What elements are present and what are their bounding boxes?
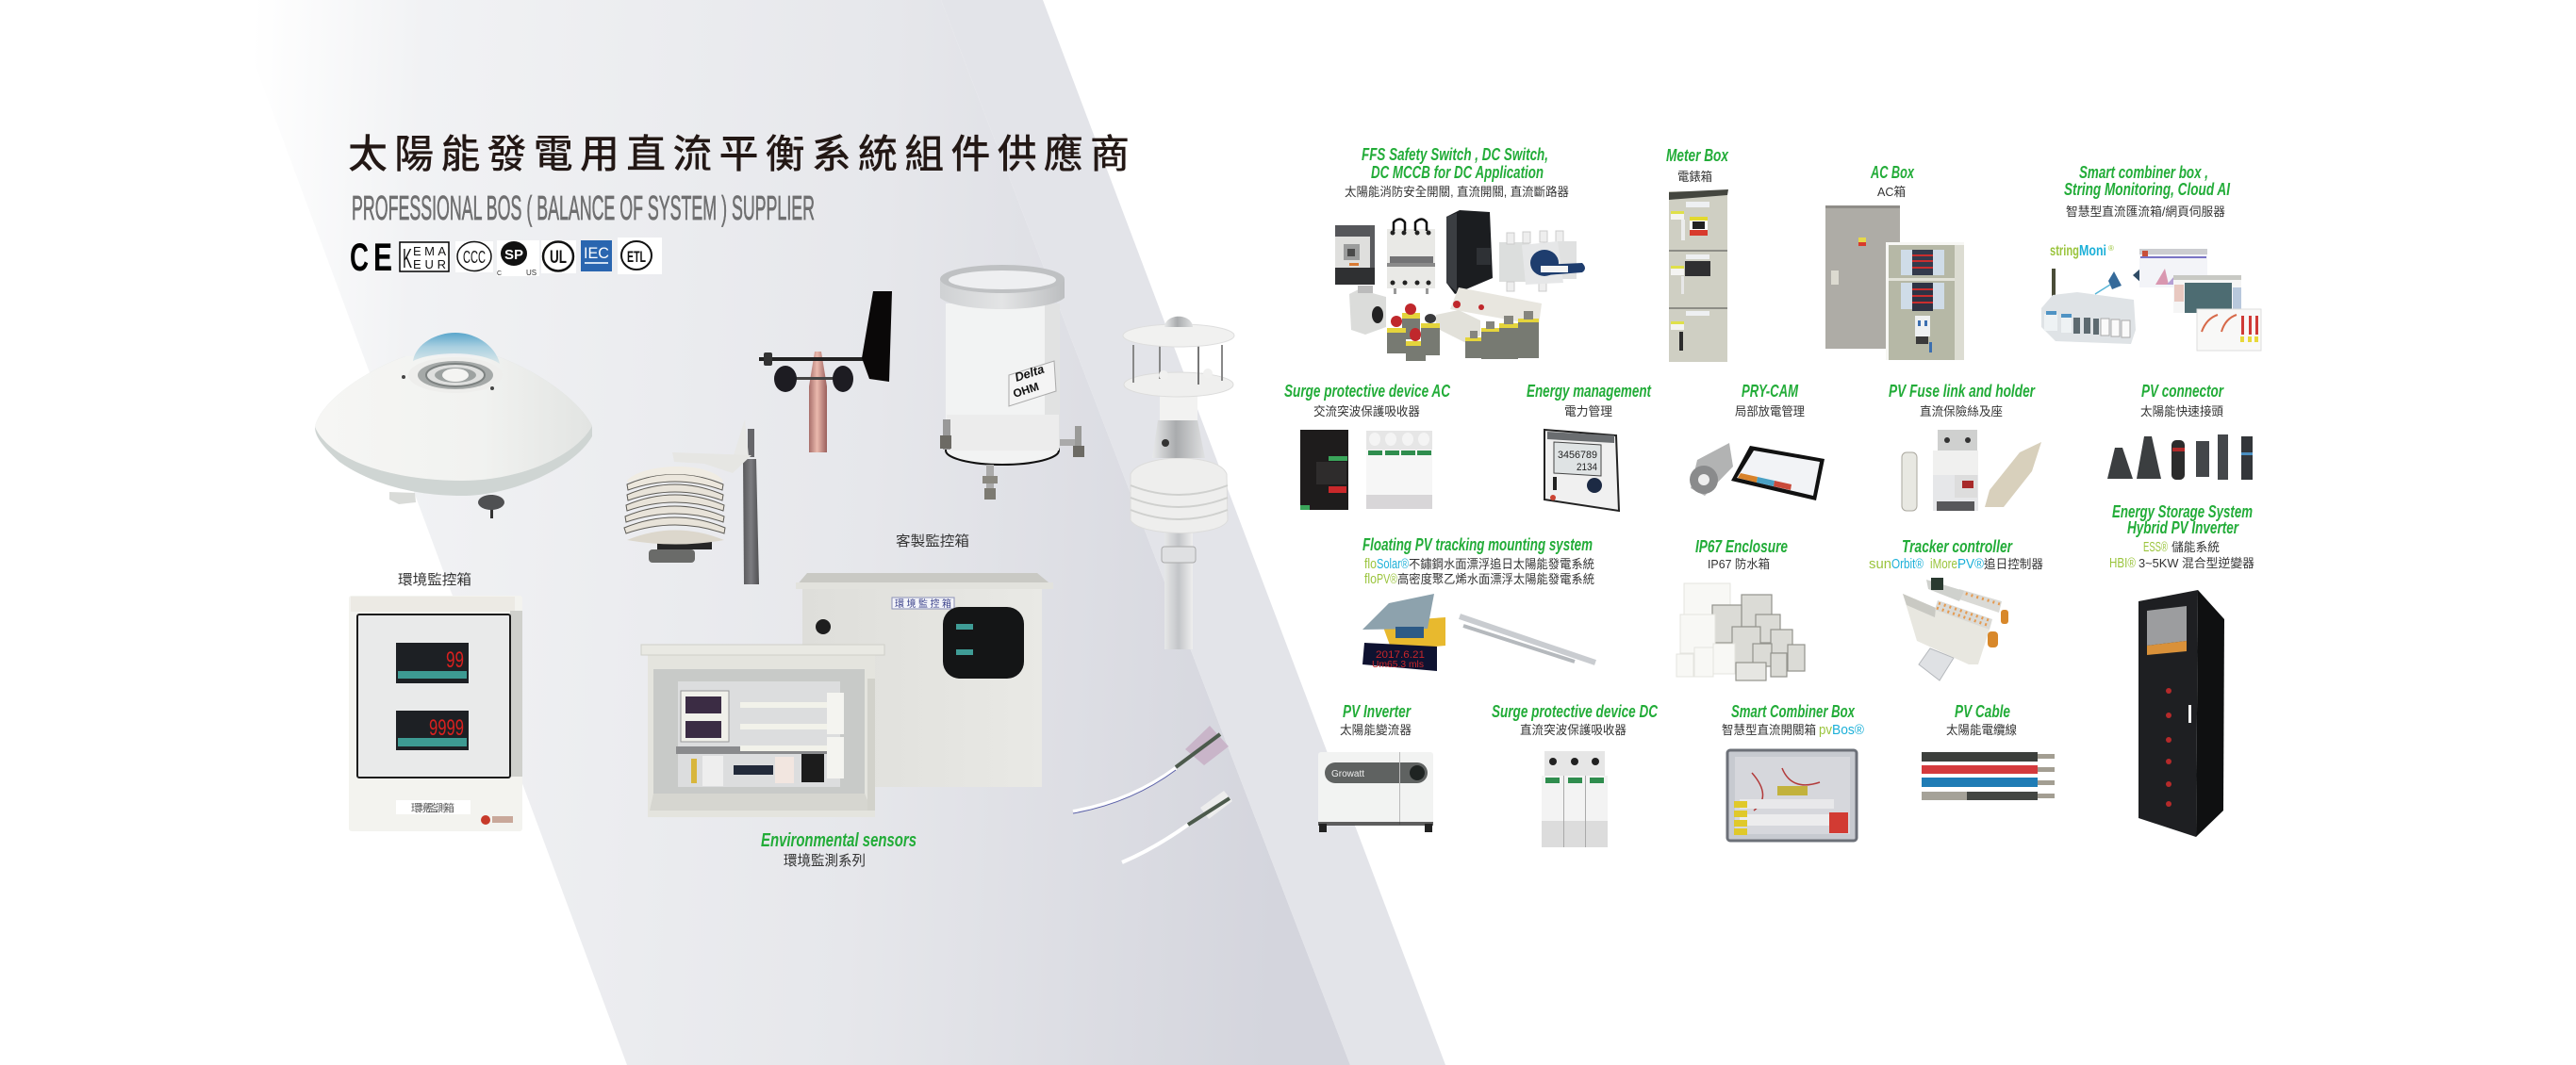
product: surge protective device DC bbox=[1492, 702, 1659, 847]
icon: wind vane bbox=[759, 291, 892, 452]
label bbox=[2109, 502, 2254, 571]
LED display bbox=[1362, 643, 1437, 671]
logo: CE: E bbox=[373, 235, 392, 279]
meter block bbox=[681, 691, 729, 742]
logo: CE bbox=[350, 235, 392, 279]
meter: 9999: 9999 bbox=[429, 715, 464, 741]
label bbox=[1340, 702, 1412, 737]
disconnect switch with blue handle bbox=[1499, 231, 1585, 291]
label: HBI® bbox=[2109, 555, 2136, 571]
logo: KEMA KEUR: K bbox=[403, 244, 412, 274]
label: Meter Box bbox=[1666, 146, 1729, 165]
label: 智慧型直流開關箱 bbox=[1722, 723, 1816, 737]
label: Solar® bbox=[1377, 556, 1409, 572]
open panel bbox=[1886, 242, 1964, 360]
closed door bbox=[1825, 205, 1900, 349]
MCB 4-pole bbox=[1387, 219, 1435, 294]
icon: rain gauge bbox=[940, 265, 1084, 500]
logo: IEC bbox=[581, 240, 612, 271]
product: PV fuse link and holder bbox=[1889, 382, 2041, 511]
label: custom monitoring box: 客製監控箱 bbox=[896, 532, 969, 549]
logo: ETL bbox=[618, 238, 662, 274]
power meter: 2134 bbox=[1577, 462, 1597, 473]
label: 局部放電管理 bbox=[1735, 404, 1805, 418]
label: sun bbox=[1869, 556, 1891, 572]
label: 智慧型直流匯流箱/網頁伺服器 bbox=[2066, 205, 2225, 219]
label: 太陽能電纜線 bbox=[1946, 723, 2017, 737]
product: PV inverter bbox=[1318, 702, 1433, 832]
power meter: 3456789 bbox=[1558, 450, 1597, 461]
string monitoring devices bbox=[2041, 269, 2150, 344]
label: String Monitoring, Cloud AI bbox=[2064, 180, 2231, 199]
label: PV® bbox=[1957, 556, 1984, 572]
SPD unit bbox=[1542, 751, 1608, 847]
meter: 9999 bbox=[396, 711, 469, 750]
label: iMore bbox=[1930, 556, 1957, 572]
tracker with solar panel bbox=[1362, 594, 1445, 650]
label bbox=[1869, 537, 2043, 572]
product: AC box bbox=[1825, 163, 1964, 360]
label: environmental sensors: 環境監測系列 bbox=[784, 852, 866, 869]
icon: rain gauge: OHM bbox=[1012, 380, 1041, 401]
label: PV Fuse link and holder bbox=[1889, 382, 2036, 401]
product: energy storage system bbox=[2109, 502, 2254, 837]
product: smart combiner box pvBos bbox=[1722, 702, 1864, 841]
logo: CSA bbox=[497, 240, 539, 277]
controller module bbox=[1903, 578, 2008, 680]
icon: environmental monitoring box bbox=[349, 596, 522, 831]
icon: custom monitoring cabinet closed: 環境監控箱 bbox=[895, 598, 951, 610]
logo: stringMoni: string bbox=[2050, 243, 2079, 259]
combiner enclosure bbox=[1727, 750, 1857, 841]
logo: CSA: SP bbox=[504, 247, 523, 263]
background panels bbox=[231, 0, 1445, 1065]
logo: CSA: C bbox=[497, 270, 502, 277]
label: 太陽能快速接頭 bbox=[2140, 404, 2223, 418]
label: Smart combiner box , bbox=[2079, 163, 2208, 182]
label: PV Cable bbox=[1955, 702, 2010, 721]
meter: 99 bbox=[396, 643, 469, 683]
label: pv bbox=[1819, 722, 1832, 738]
label bbox=[2064, 163, 2231, 219]
icon: thermo-hygrometer radiation shield on pole bbox=[624, 419, 759, 584]
label: Tracker controller bbox=[1902, 537, 2013, 556]
label: 3~5KW 混合型逆變器 bbox=[2138, 556, 2254, 570]
storage cabinet bbox=[2138, 590, 2224, 837]
label: 直流保險絲及座 bbox=[1920, 404, 2003, 418]
label: Smart Combiner Box bbox=[1731, 702, 1856, 721]
label: Floating PV tracking mounting system bbox=[1362, 535, 1593, 554]
MCCB breaker bbox=[1335, 225, 1375, 285]
tablet bbox=[1731, 446, 1825, 500]
label: FFS Safety Switch , DC Switch, bbox=[1362, 145, 1548, 164]
LED display: Um65.3 mls bbox=[1372, 660, 1424, 670]
label bbox=[1492, 702, 1659, 737]
label: 太陽能消防安全開關, 直流開關, 直流斷路器 bbox=[1345, 185, 1569, 199]
label: Orbit® bbox=[1891, 556, 1924, 572]
label: AC Box bbox=[1870, 163, 1915, 182]
product: PRY-CAM bbox=[1690, 382, 1825, 500]
connectors bbox=[2107, 434, 2253, 480]
icon: wire temperature sensors bbox=[1073, 726, 1232, 862]
label: Surge protective device DC bbox=[1492, 702, 1659, 721]
label: 追日控制器 bbox=[1984, 557, 2043, 571]
stacks with red caps bbox=[1387, 303, 1440, 361]
logo: KEMA KEUR: EMA bbox=[413, 244, 446, 258]
label: environmental sensors bbox=[761, 830, 916, 869]
icon: custom monitoring cabinet closed bbox=[796, 573, 1053, 787]
label bbox=[1695, 537, 1788, 571]
label: AC箱 bbox=[1877, 185, 1906, 199]
label: 直流突波保護吸收器 bbox=[1520, 723, 1627, 737]
label bbox=[1345, 145, 1569, 199]
power meter bbox=[1544, 430, 1619, 511]
mounting rail bbox=[1460, 616, 1595, 663]
logo: UL: UL bbox=[550, 248, 567, 268]
logo: KEMA KEUR: EUR bbox=[413, 257, 446, 271]
label bbox=[1870, 163, 1915, 199]
LED display: 2017.6.21 bbox=[1376, 649, 1425, 661]
logo: stringMoni: Moni bbox=[2079, 243, 2106, 259]
label: 儲能系統 bbox=[2171, 540, 2220, 554]
enclosures bbox=[1676, 583, 1805, 680]
product: energy management bbox=[1527, 382, 1652, 511]
label: IP67 防水箱 bbox=[1708, 557, 1770, 571]
label: 不鏽鋼水面漂浮追日太陽能發電系統 bbox=[1409, 557, 1594, 571]
white SPD bbox=[1366, 431, 1432, 509]
logo: CCC: CCC bbox=[463, 248, 486, 267]
sensor bbox=[1690, 443, 1733, 496]
label: Surge protective device AC bbox=[1284, 382, 1451, 401]
icon: environmental monitoring box: 環境監測箱 bbox=[411, 801, 454, 814]
logo: CSA: US bbox=[526, 269, 537, 277]
logo: stringMoni bbox=[2050, 243, 2114, 259]
label: DC MCCB for DC Application bbox=[1371, 163, 1544, 182]
label: 電錶箱 bbox=[1677, 170, 1712, 184]
label: 電力管理 bbox=[1564, 404, 1612, 418]
stacks with gray caps bbox=[1465, 311, 1539, 359]
icon: rain gauge: Delta bbox=[1013, 362, 1046, 385]
label bbox=[1666, 146, 1729, 184]
label bbox=[1722, 702, 1864, 738]
product: PV connector bbox=[2107, 382, 2253, 480]
logo: UL bbox=[541, 240, 576, 273]
label: environmental sensors: Environmental sensors bbox=[761, 830, 916, 851]
text: PROFESSIONAL BOS ( BALANCE OF SYSTEM ) SUPPLIER bbox=[352, 188, 815, 227]
cabinet bbox=[1669, 189, 1728, 362]
label bbox=[1284, 382, 1451, 418]
label bbox=[1362, 535, 1594, 587]
label: ESS® bbox=[2143, 539, 2168, 555]
product: floating PV tracking mounting system bbox=[1362, 535, 1595, 671]
icon: open monitoring cabinet bbox=[641, 645, 884, 817]
label: PV connector bbox=[2141, 382, 2224, 401]
logo: IEC: IEC bbox=[584, 244, 609, 262]
label: PV® bbox=[1377, 571, 1397, 587]
rotary isolator box bbox=[1349, 286, 1386, 335]
black SPD bbox=[1300, 430, 1348, 510]
label: Hybrid PV Inverter bbox=[2127, 518, 2239, 537]
product: smart combiner box bbox=[2041, 163, 2261, 351]
DC isolator cluster bbox=[1387, 287, 1542, 361]
product: surge protective device AC bbox=[1284, 382, 1451, 510]
certification logos bbox=[350, 235, 662, 279]
logo: KEMA KEUR bbox=[400, 242, 449, 274]
logo: ETL: ETL bbox=[627, 248, 646, 266]
product: IP67 enclosure bbox=[1676, 537, 1805, 680]
black breaker bbox=[1446, 210, 1493, 294]
product: FFS safety switch bbox=[1335, 145, 1585, 361]
label: 太陽能變流器 bbox=[1340, 723, 1412, 737]
product: PV cable bbox=[1922, 702, 2055, 800]
fuse bbox=[1902, 452, 1917, 511]
label bbox=[1527, 382, 1652, 418]
inverter unit: Growatt bbox=[1331, 769, 1364, 779]
label: 交流突波保護吸收器 bbox=[1313, 404, 1420, 418]
fuse blade bbox=[1985, 442, 2041, 507]
software screens bbox=[2139, 249, 2261, 351]
logo: stringMoni: ® bbox=[2108, 244, 2114, 253]
label: flo bbox=[1364, 556, 1377, 572]
fuse holder bbox=[1933, 430, 1978, 511]
cables bbox=[1922, 752, 2055, 800]
label: 高密度聚乙烯水面漂浮太陽能發電系統 bbox=[1397, 572, 1594, 586]
label: IP67 Enclosure bbox=[1695, 537, 1788, 556]
label: flo bbox=[1364, 571, 1377, 587]
label: PV Inverter bbox=[1343, 702, 1412, 721]
icon: pyranometer bbox=[315, 333, 592, 518]
icon: compact weather station bbox=[1123, 317, 1234, 649]
label bbox=[1889, 382, 2036, 418]
label: Energy Storage System bbox=[2112, 502, 2253, 521]
label: Bos® bbox=[1832, 722, 1864, 738]
product: tracker controller bbox=[1869, 537, 2043, 680]
label: environmental monitoring box: 環境監控箱 bbox=[398, 571, 471, 588]
logo: CCC bbox=[455, 241, 493, 272]
logo: CE: C bbox=[350, 235, 369, 279]
title: 太陽能發電用直流平衡系統組件供應商 bbox=[348, 132, 1130, 176]
label: PRY-CAM bbox=[1742, 382, 1799, 401]
label bbox=[2140, 382, 2224, 418]
product: meter box bbox=[1666, 146, 1729, 362]
label bbox=[1946, 702, 2017, 737]
meter: 99: 99 bbox=[446, 647, 464, 673]
label: Energy management bbox=[1527, 382, 1652, 401]
label bbox=[1735, 382, 1805, 418]
